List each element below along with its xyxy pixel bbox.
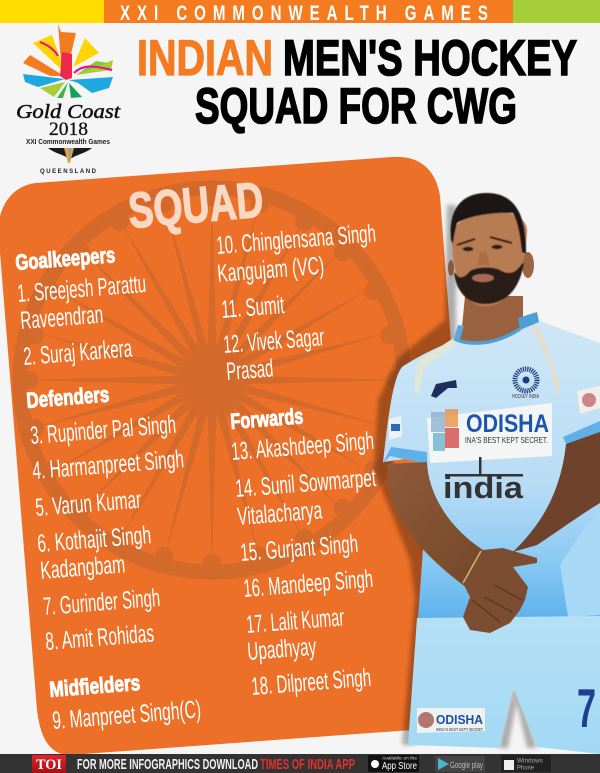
logo: Gold Coast 2018 [16, 24, 120, 175]
hockey india emblem [512, 369, 540, 400]
shoulder stripes [414, 323, 560, 395]
roster column 1: 7. Gurinder Singh [42, 584, 161, 621]
roster column 1: Defenders [25, 382, 110, 413]
roster column 2: Upadhyay [246, 633, 318, 666]
heading: SQUAD: SQUAD [126, 171, 265, 239]
roster column 2: 17. Lalit Kumar [245, 603, 345, 639]
roster column 1: Kadangbam [39, 550, 126, 585]
top banner [0, 0, 600, 25]
right arm [513, 432, 600, 552]
roster column 1: 5. Varun Kumar [34, 486, 142, 522]
logo: Gold Coast 2018: Gold Coast [16, 101, 120, 123]
roster column 2: Vitalacharya [236, 496, 323, 531]
roster column 2: 11. Sumit [220, 291, 285, 324]
roster column 1: Midfielders [48, 670, 141, 702]
footer bar [0, 754, 600, 773]
windows phone badge [501, 755, 551, 772]
google play badge [435, 756, 485, 772]
roster column 1: 6. Kothajit Singh [36, 521, 152, 558]
shorts sponsor: ODISHA [436, 712, 484, 727]
roster column 1: 4. Harmanpreet Singh [31, 445, 185, 485]
windows phone badge: Windows [517, 758, 544, 764]
logo: Gold Coast 2018: 2018 [49, 119, 88, 140]
chakra watermark [20, 188, 404, 572]
hockey india emblem: HOCKEY INDIA [512, 394, 540, 400]
roster column 2: 16. Mandeep Singh [242, 565, 374, 603]
head [451, 193, 527, 306]
roster column 1: 3. Rupinder Pal Singh [29, 411, 177, 450]
panel: squad [0, 157, 480, 755]
left arm [387, 462, 483, 590]
roster column 2: Forwards [229, 403, 304, 434]
shirt logo [431, 380, 457, 398]
nose [477, 252, 490, 265]
roster column 1: Raveendran [19, 301, 104, 335]
ears [448, 252, 534, 278]
hands [463, 548, 537, 633]
footer bar: TIMES OF INDIA APP [260, 756, 355, 773]
roster column 2: 13. Akashdeep Singh [230, 427, 375, 466]
TOI badge: TOI [36, 757, 62, 773]
logo: Gold Coast 2018: QUEENSLAND [40, 169, 97, 175]
shirt side panel [560, 510, 600, 617]
roster column 2: 15. Gurjant Singh [239, 530, 359, 567]
google play badge: Google play [450, 760, 483, 770]
title: INDIAN [137, 30, 273, 86]
india wordmark [443, 457, 524, 505]
india wordmark: india [443, 470, 524, 505]
shorts sponsor: INDIA'S BEST KEPT SECRET [436, 727, 483, 732]
roster column 2 [215, 220, 377, 701]
roster column 2: Prasad [225, 354, 274, 386]
logo: Gold Coast 2018: XXI Commonwealth Games [26, 139, 110, 146]
roster column 1: 1. Sreejesh Parattu [16, 270, 147, 308]
eyes and brows [457, 239, 475, 245]
shirt [383, 320, 600, 618]
hair [451, 193, 526, 254]
roster column 1 [14, 242, 202, 735]
roster column 2: 14. Sunil Sowmarpet [234, 464, 377, 503]
neck [458, 296, 523, 345]
roster column 2: 10. Chinglensana Singh [215, 220, 377, 260]
roster column 2: Kangujam (VC) [216, 252, 325, 288]
top banner: XXI COMMONWEALTH GAMES [120, 0, 488, 25]
shorts [408, 616, 600, 754]
sleeve patches [389, 386, 600, 440]
sponsor banner: ODISHA [466, 410, 549, 438]
shorts sponsor [417, 708, 485, 733]
roster column 2: 12. Vivek Sagar [222, 323, 325, 359]
roster column 1: Goalkeepers [14, 242, 116, 275]
roster column 1: 9. Manpreet Singh(C) [51, 695, 202, 735]
sponsor banner [427, 403, 552, 463]
roster column 1: 8. Amit Rohidas [44, 620, 155, 656]
title [137, 30, 577, 134]
mouth [472, 274, 494, 282]
app store badge: Available on the [382, 756, 418, 760]
footer text: FOR MORE INFOGRAPHICS DOWNLOAD [77, 756, 258, 773]
app store badge [368, 755, 419, 772]
app store badge: App Store [382, 761, 417, 772]
face [452, 211, 527, 306]
roster column 1: 2. Suraj Karkera [22, 335, 133, 371]
player shadow [374, 205, 537, 748]
windows phone badge: Phone [517, 764, 534, 772]
sponsor banner: INA'S BEST KEPT SECRET. [465, 435, 548, 445]
sleeve cuffs [383, 421, 600, 464]
player illustration [374, 193, 600, 754]
roster column 2: 18. Dilpreet Singh [250, 664, 372, 701]
collar [454, 312, 539, 343]
beard [454, 262, 524, 304]
